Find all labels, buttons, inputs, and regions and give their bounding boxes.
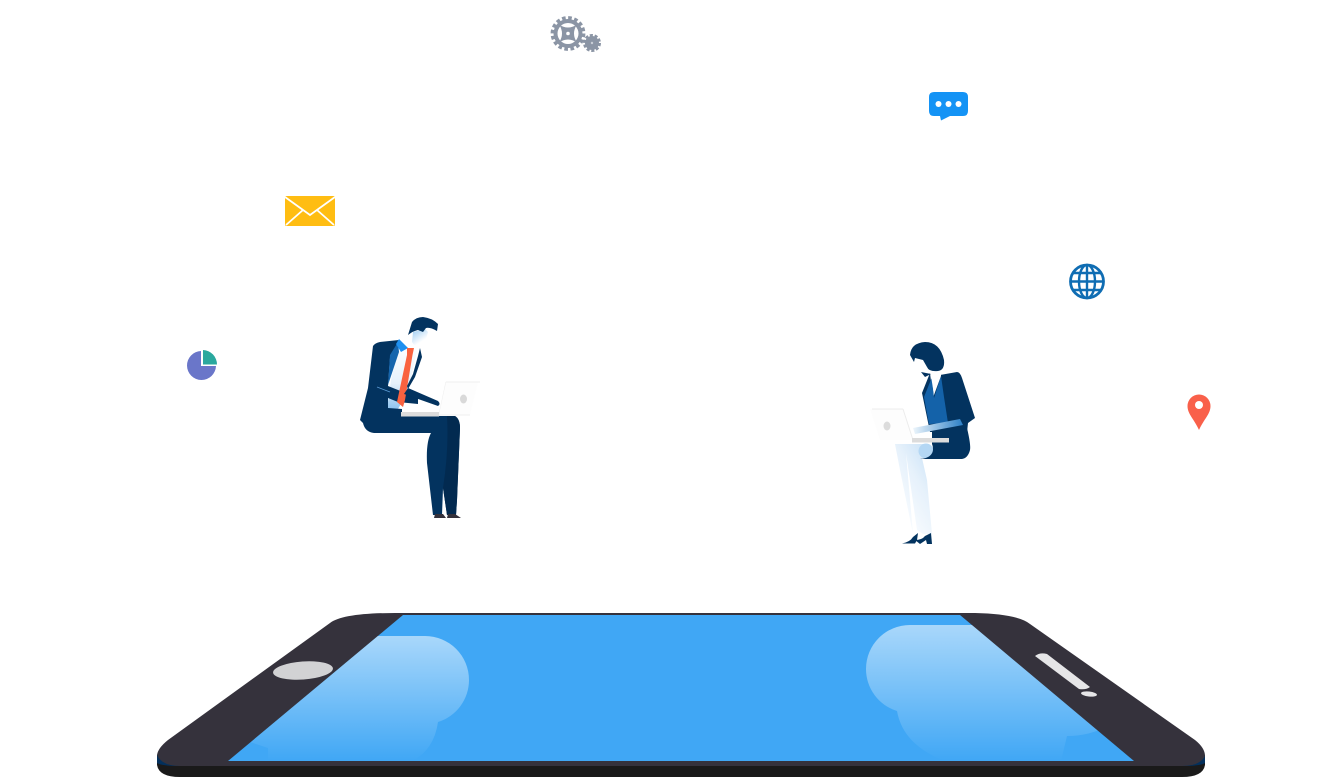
woman arm: [913, 419, 963, 434]
woman neck: [927, 366, 941, 395]
icon: globe: [1070, 265, 1104, 298]
man sleeve highlight: [377, 387, 390, 392]
right cloud: [866, 625, 1098, 750]
man tie: [397, 348, 414, 407]
man back leg shading: [443, 416, 460, 515]
man collar: [396, 339, 408, 352]
icon: pie chart: [187, 350, 217, 380]
woman skirt: [920, 428, 970, 459]
man jacket: [360, 340, 460, 515]
icon: location pin: [1188, 394, 1210, 430]
woman scarf: [921, 372, 931, 377]
laptop: [401, 382, 480, 416]
woman vest: [924, 376, 948, 424]
home button: [272, 659, 334, 682]
man lapel blue: [388, 342, 399, 385]
phone screen: [228, 615, 1134, 761]
camera dot: [1081, 691, 1097, 697]
icon: gears: [552, 18, 600, 50]
man shoes: [434, 514, 461, 518]
left cloud: [251, 636, 469, 751]
man hair: [408, 317, 438, 335]
phone body: [157, 613, 1205, 766]
icon: envelope: [285, 196, 335, 226]
man face: [412, 329, 428, 350]
phone edge accent: [157, 755, 1205, 766]
woman hair: [910, 342, 944, 371]
man right lapel: [407, 348, 422, 389]
phone base: [157, 755, 1205, 777]
smartphone: [157, 613, 1205, 777]
woman jacket: [922, 372, 975, 432]
speaker: [1035, 653, 1090, 689]
icon: chat bubble: [929, 92, 968, 120]
illustration canvas: [157, 16, 1210, 777]
figure: man with laptop: [360, 317, 480, 518]
figure: woman with laptop: [870, 342, 975, 544]
man forearm: [404, 388, 440, 406]
woman knee: [918, 444, 934, 458]
man shirt: [387, 345, 417, 409]
woman legs: [895, 444, 933, 534]
laptop: [870, 409, 949, 442]
woman shoes: [902, 533, 932, 544]
screen clouds: [251, 625, 1098, 751]
